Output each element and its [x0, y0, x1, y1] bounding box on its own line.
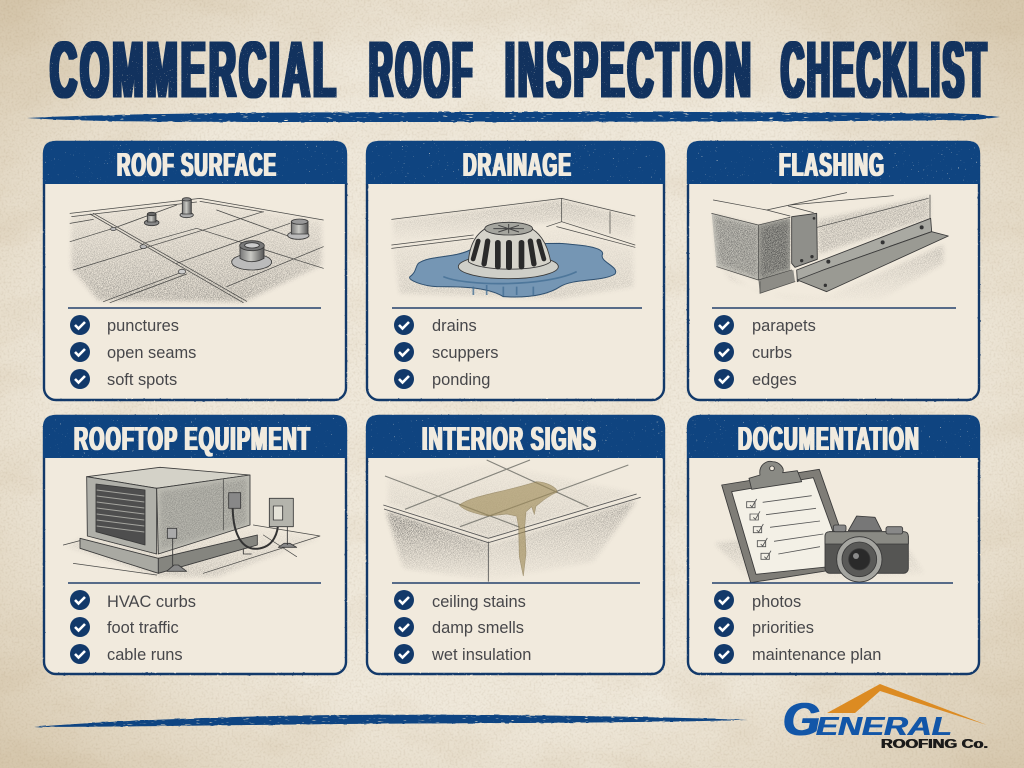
illustration: clipboard and camera — [715, 461, 925, 583]
divider: documentation — [712, 582, 953, 584]
panel: drainage — [366, 141, 665, 400]
checklist: rooftop equipment — [70, 590, 196, 664]
icon: clipboard — [722, 461, 853, 583]
panel: rooftop equipment — [43, 415, 347, 674]
title — [50, 25, 989, 114]
heading: roof surface: ROOF SURFACE — [117, 146, 277, 183]
divider: rooftop equipment — [68, 582, 321, 584]
heading: interior signs: INTERIOR SIGNS — [422, 420, 597, 457]
checklist: flashing: curbs — [752, 344, 792, 362]
bottom brush stroke — [34, 715, 748, 727]
divider: roof surface — [68, 307, 321, 309]
icon: drain dome — [458, 222, 558, 279]
panel header: drainage — [366, 141, 665, 184]
illustration: HVAC unit — [63, 467, 320, 577]
checklist: flashing — [714, 315, 816, 389]
heading: rooftop equipment: ROOFTOP EQUIPMENT — [74, 420, 311, 457]
panel header: documentation — [687, 415, 980, 458]
checklist: roof surface: open seams — [107, 344, 196, 362]
checklist: drainage: drains — [432, 317, 477, 335]
checklist: interior signs — [394, 590, 531, 664]
panel: flashing — [687, 141, 980, 400]
title: COMMERCIAL — [50, 25, 339, 114]
checklist: flashing: edges — [752, 371, 797, 389]
divider: flashing — [712, 307, 956, 309]
logo: General Roofing Co. — [783, 684, 988, 751]
checklist: drainage: scuppers — [432, 344, 499, 362]
checklist: roof surface: soft spots — [107, 371, 177, 389]
icon: camera — [825, 516, 908, 582]
checklist: documentation — [714, 590, 881, 664]
panel: documentation — [687, 415, 980, 674]
checklist: documentation: priorities — [752, 619, 814, 637]
panel header: rooftop equipment — [43, 415, 347, 458]
checklist: interior signs: wet insulation — [431, 646, 531, 664]
illustration: parapet and metal flashing — [712, 193, 948, 302]
panel header: interior signs — [366, 415, 665, 458]
heading: drainage: DRAINAGE — [463, 146, 572, 183]
illustration: roof membrane with pipes — [70, 198, 323, 303]
title: ROOF — [369, 25, 475, 114]
panel: roof surface — [43, 141, 347, 400]
icon: vent pipes — [144, 198, 309, 270]
checklist: drainage — [394, 315, 499, 389]
checklist: interior signs: ceiling stains — [432, 593, 526, 611]
illustration: roof drain in puddle — [392, 198, 635, 298]
checklist: drainage: ponding — [432, 371, 490, 389]
divider: drainage — [392, 307, 642, 309]
checklist: documentation: photos — [752, 593, 801, 611]
logo initial: G — [783, 693, 820, 745]
checklist: roof surface — [70, 315, 196, 389]
puddle — [410, 243, 616, 297]
panel header: flashing — [687, 141, 980, 184]
logo tagline: ROOFING Co. — [881, 737, 988, 751]
water stain — [459, 482, 557, 576]
divider: interior signs — [392, 582, 640, 584]
panel header: roof surface — [43, 141, 347, 184]
checklist: rooftop equipment: cable runs — [107, 646, 183, 664]
checklist: roof surface: punctures — [107, 317, 179, 335]
icon: orange roof — [827, 684, 987, 725]
flashing metal — [792, 213, 948, 292]
panel: interior signs — [366, 415, 665, 674]
logo wordmark: ENERAL — [816, 711, 952, 741]
checklist: documentation: maintenance plan — [752, 646, 881, 664]
checklist: flashing: parapets — [752, 317, 816, 335]
checklist: interior signs: damp smells — [432, 619, 524, 637]
top brush stroke — [27, 112, 1000, 122]
checklist: rooftop equipment: HVAC curbs — [107, 593, 196, 611]
checklist: rooftop equipment: foot traffic — [107, 619, 179, 637]
heading: flashing: FLASHING — [779, 146, 885, 183]
illustration: stained ceiling corner — [383, 460, 641, 582]
